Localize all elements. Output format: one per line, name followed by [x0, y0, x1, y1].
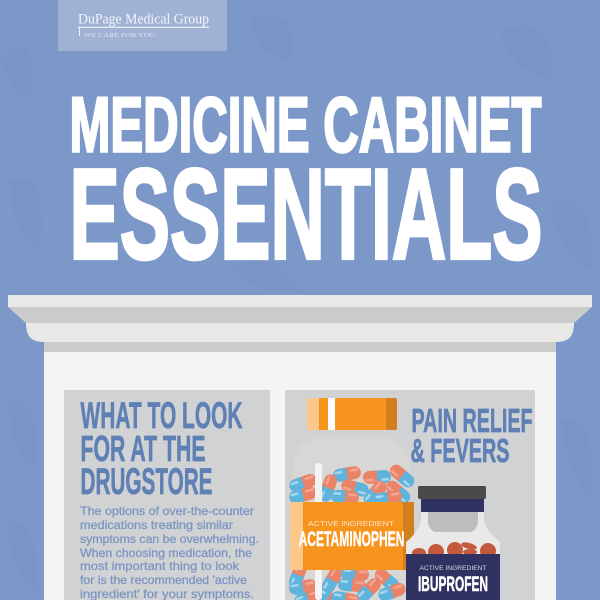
cabinet body	[44, 352, 556, 600]
panel: pain relief	[285, 390, 535, 600]
bottle glass	[293, 437, 410, 600]
heading: what to look for at the drugstore: WHAT TO LOOK	[80, 394, 243, 436]
body text: for is the recommended 'active	[80, 573, 247, 587]
panel: what to look for	[64, 390, 270, 600]
heading: what to look for at the drugstore: FOR AT THE	[80, 428, 206, 469]
heading: pain relief and fevers: & FEVERS	[410, 433, 510, 470]
orange label: ACETAMINOPHEN	[298, 528, 404, 551]
navy label: ACTIVE INGREDIENT	[420, 565, 487, 572]
body text: The options of over-the-counter	[80, 504, 254, 518]
logo: DuPage Medical Group: WE CARE FOR YOU	[84, 33, 156, 39]
navy label	[406, 554, 500, 600]
logo: DuPage Medical Group	[58, 0, 227, 51]
heading: pain relief and fevers	[410, 403, 532, 470]
dark cap	[418, 486, 486, 499]
logo: DuPage Medical Group: DuPage Medical Group	[78, 12, 209, 28]
orange cap	[307, 398, 397, 430]
body text: When choosing medication, the	[80, 546, 252, 560]
icon: ibuprofen bottle	[406, 486, 500, 600]
body text	[80, 504, 259, 600]
capsules	[287, 462, 417, 600]
orange label: ACTIVE INGREDIENT	[308, 519, 395, 528]
body text: medications treating similar	[80, 518, 233, 532]
orange label	[290, 502, 414, 570]
cabinet cornice	[8, 295, 592, 352]
heading: what to look for at the drugstore	[80, 394, 243, 502]
bottle glass	[406, 512, 500, 600]
icon: acetaminophen bottle	[287, 398, 417, 600]
heading: what to look for at the drugstore: DRUGSTORE	[80, 460, 212, 502]
body text: symptoms can be overwhelming.	[80, 532, 259, 546]
red tablets	[412, 541, 496, 560]
glass highlight	[315, 463, 322, 600]
body text: most important thing to look	[80, 559, 240, 573]
title	[70, 80, 542, 286]
navy label: IBUPROFEN	[418, 573, 488, 596]
